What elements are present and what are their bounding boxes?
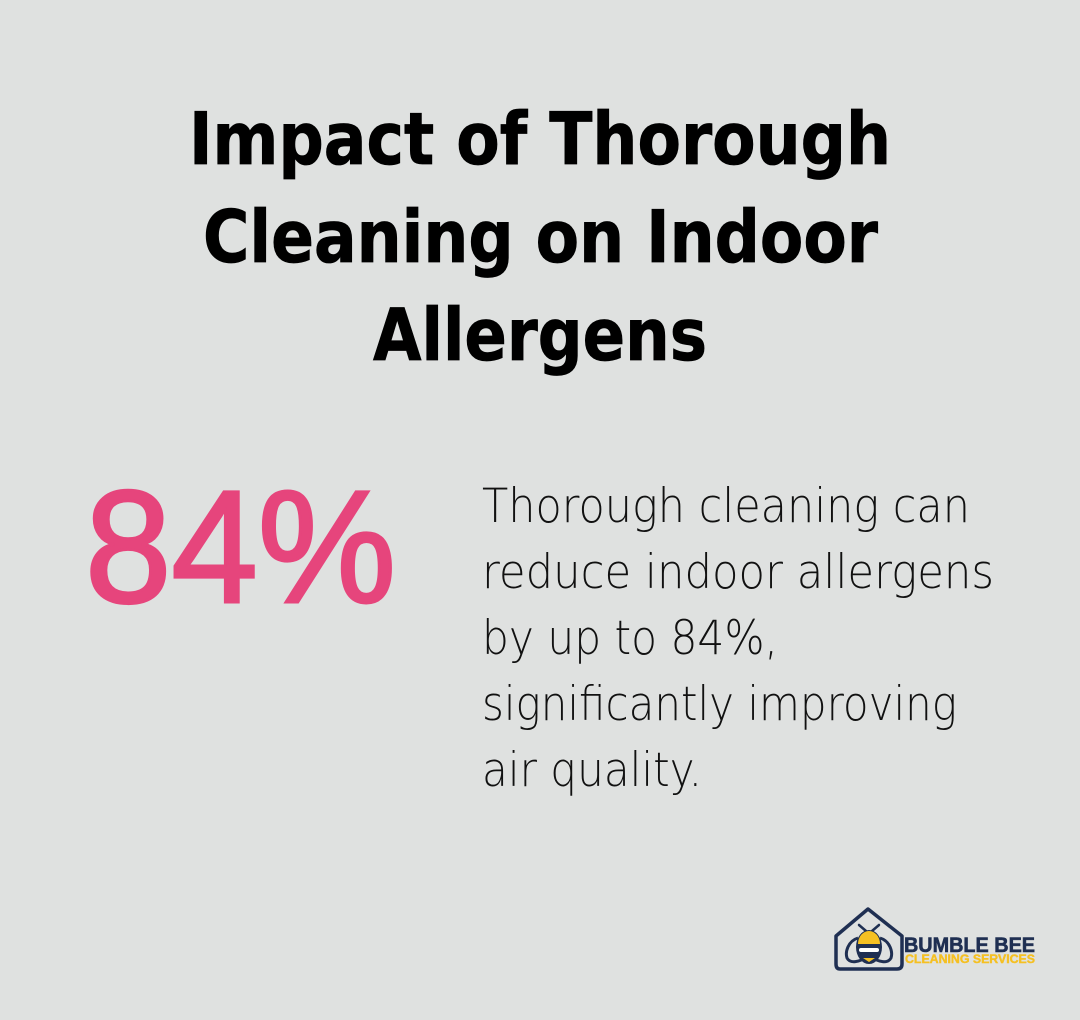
description text: air quality.	[482, 743, 702, 798]
description text: reduce indoor allergens	[482, 545, 994, 600]
title: Impact of Thorough	[189, 97, 891, 181]
big statistic: 84%: 84%	[85, 457, 396, 636]
title: Allergens	[373, 293, 707, 377]
title	[189, 97, 891, 377]
logo: Bumble Bee Cleaning Services	[836, 909, 1035, 969]
title: Cleaning on Indoor	[203, 195, 878, 279]
logo wordmark: BUMBLE BEE	[904, 934, 1035, 957]
description text: by up to 84%,	[482, 611, 778, 666]
description text: significantly improving	[482, 677, 957, 732]
description text: Thorough cleaning can	[482, 479, 970, 534]
description text	[482, 479, 994, 798]
logo tagline: CLEANING SERVICES	[905, 954, 1035, 966]
icon: house outline with bee	[836, 909, 902, 969]
